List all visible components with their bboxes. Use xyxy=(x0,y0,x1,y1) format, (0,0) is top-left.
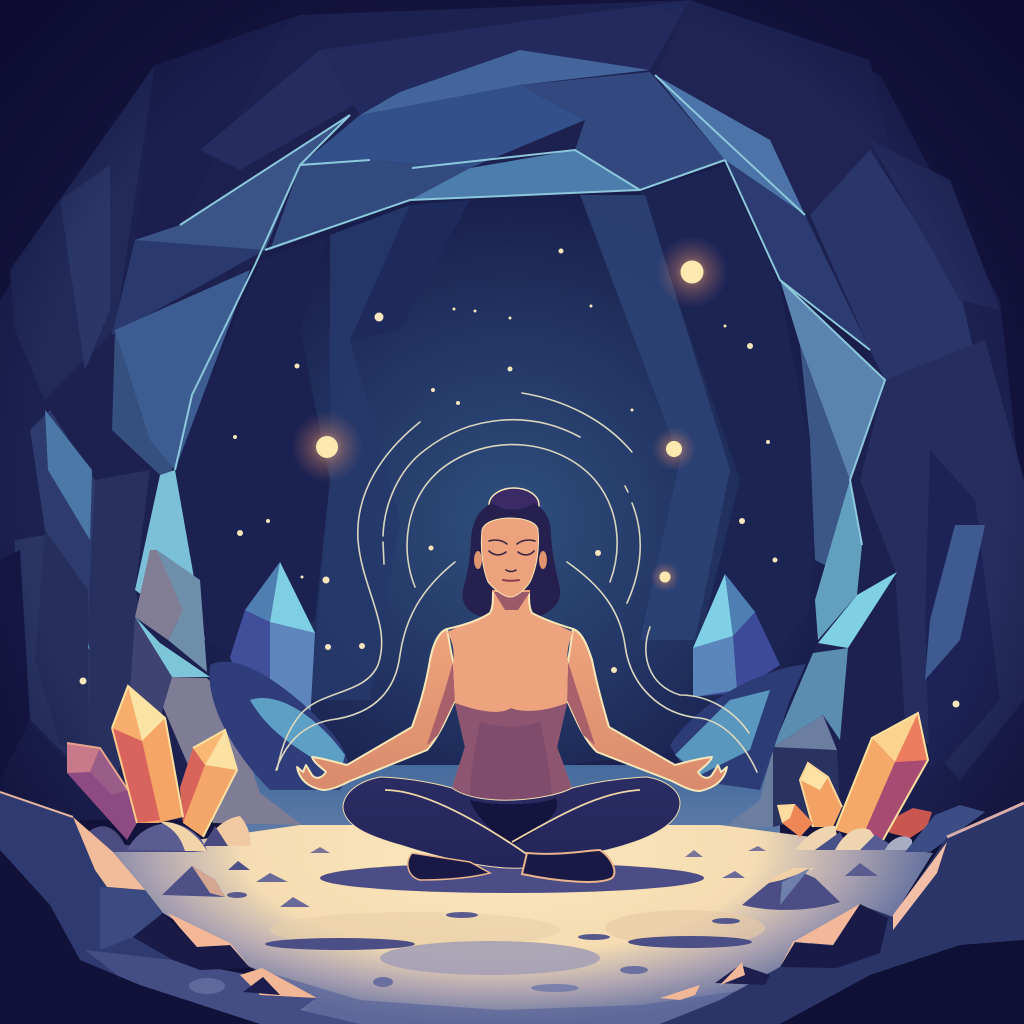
top side shading xyxy=(470,722,552,801)
left foot xyxy=(408,853,490,880)
crystal: central orange xyxy=(112,686,183,823)
light orbs xyxy=(80,236,960,708)
leg crease lines xyxy=(385,790,640,855)
panel: foreground rocks right xyxy=(660,803,1024,1024)
torso xyxy=(447,590,573,800)
icon: right blue crystal xyxy=(693,574,780,697)
neck shadow xyxy=(494,592,530,610)
shadow under figure xyxy=(320,863,704,893)
crystal: right orange xyxy=(180,730,237,837)
orb: right xyxy=(652,427,696,471)
inner leg shade xyxy=(470,798,557,845)
crystal: tiny orange xyxy=(777,804,813,837)
panel: glowing arch facets xyxy=(115,50,897,828)
figure: meditating woman xyxy=(297,488,727,893)
crystal: purple shard xyxy=(67,743,137,840)
orb: left xyxy=(291,411,363,483)
orb: top right xyxy=(656,236,728,308)
arm inner shade left xyxy=(427,662,455,745)
panel: sand floor xyxy=(113,825,933,1024)
shoulder outline xyxy=(430,592,592,660)
hair back xyxy=(462,503,560,618)
small sparkles xyxy=(80,248,960,708)
facial features xyxy=(489,540,535,581)
crystal base rocks xyxy=(85,805,985,852)
energy lines xyxy=(276,393,757,772)
hair bun xyxy=(489,488,539,522)
face xyxy=(481,518,539,597)
ear right xyxy=(539,551,547,569)
right foot xyxy=(522,850,614,882)
floor stones xyxy=(162,846,878,992)
ears xyxy=(474,551,482,569)
legs xyxy=(343,777,680,868)
icon: left blue crystal xyxy=(230,562,315,720)
left arm xyxy=(297,629,455,790)
crystal: large orange xyxy=(835,713,928,840)
back sand strip xyxy=(240,765,780,835)
arm inner shade right xyxy=(567,662,595,745)
right crystal cluster xyxy=(777,713,932,840)
top xyxy=(452,703,572,800)
crystal: red shard xyxy=(880,808,932,838)
panel: inner cave hollow xyxy=(172,160,870,800)
right arm xyxy=(567,629,727,791)
orb: lower right xyxy=(650,562,680,592)
back rock mounds xyxy=(209,662,806,790)
panel: foreground rocks left xyxy=(0,792,360,1024)
left crystal cluster xyxy=(67,686,237,840)
crystal: medium orange xyxy=(800,763,842,827)
